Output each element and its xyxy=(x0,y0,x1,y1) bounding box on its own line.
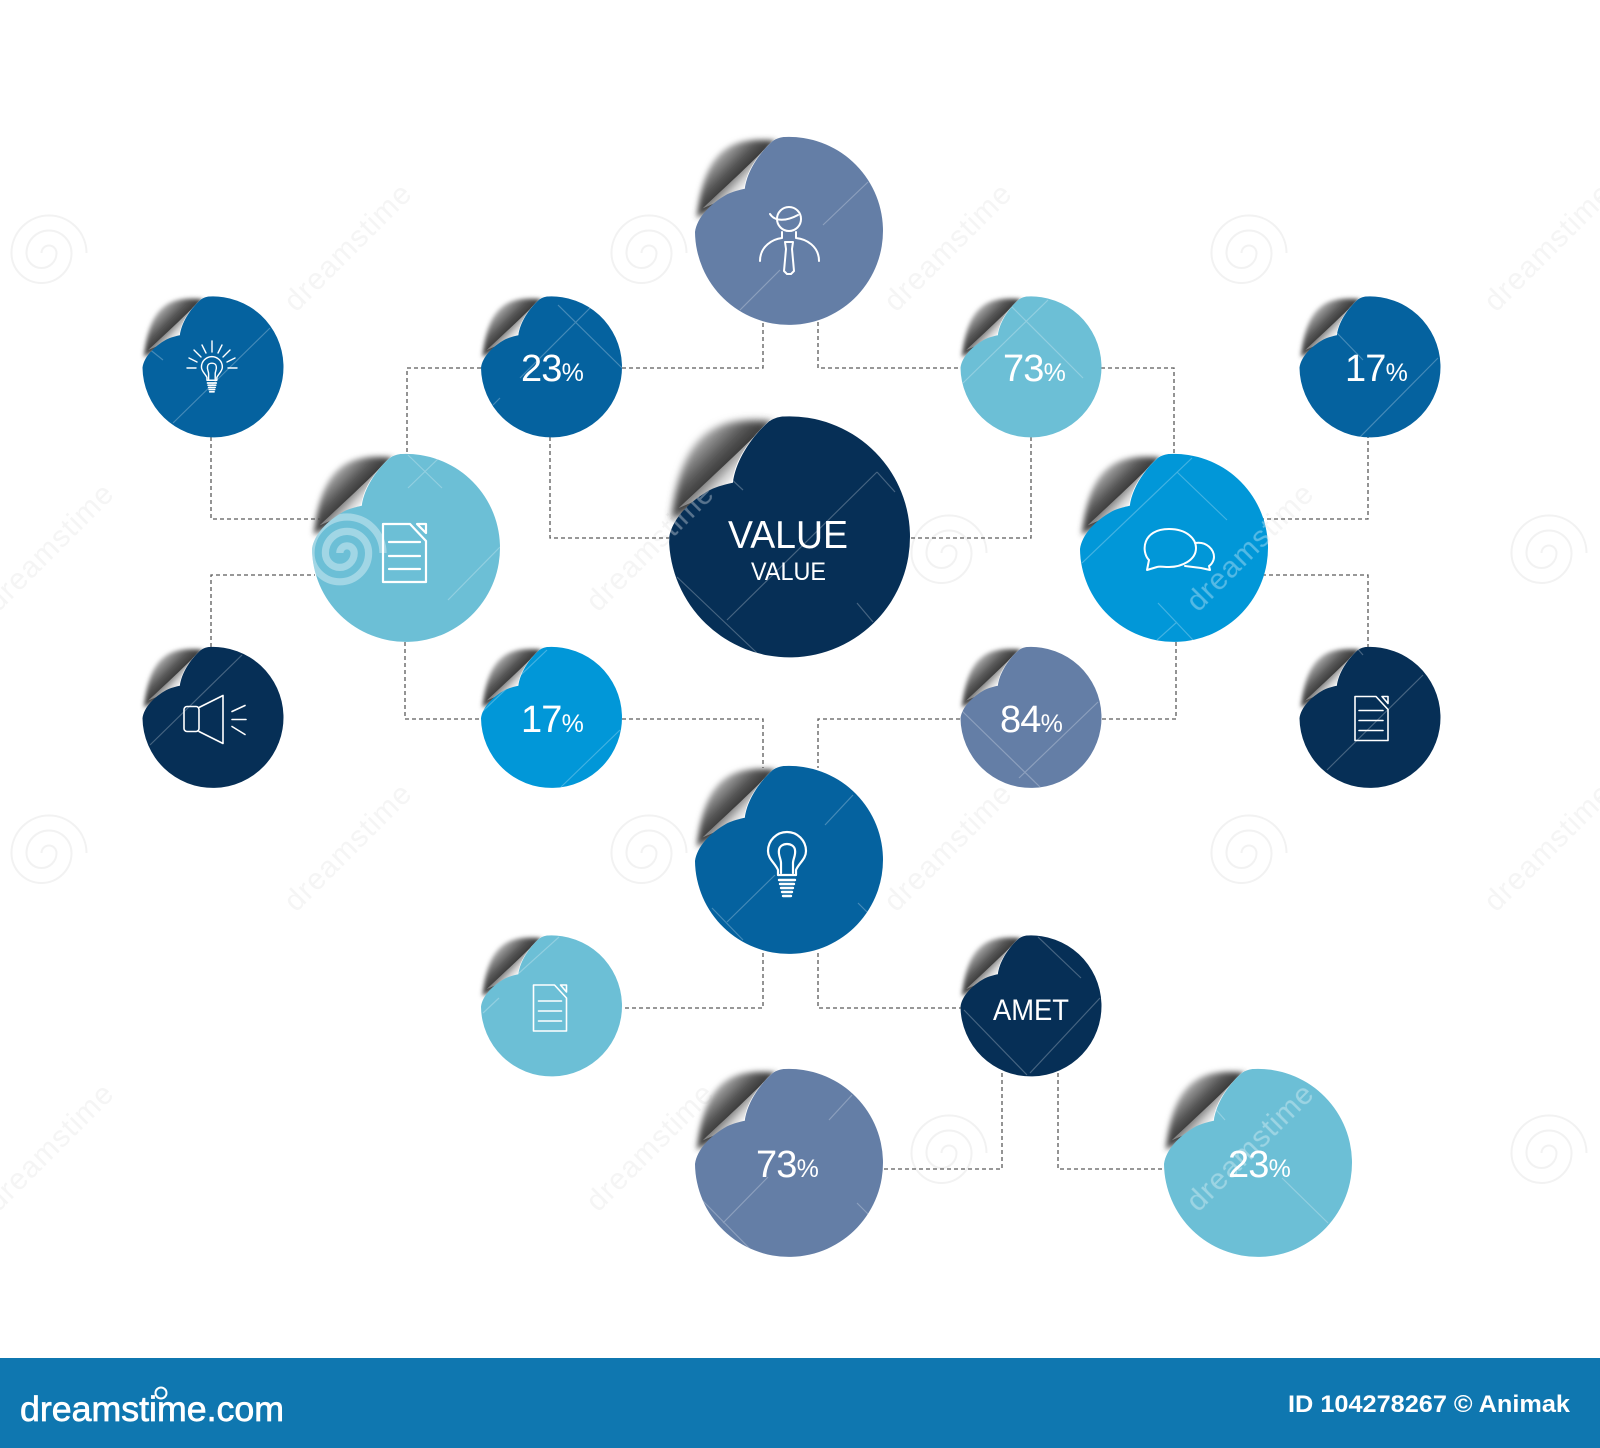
footer credit: ID 104278267 © Animak xyxy=(1288,1391,1571,1418)
value: 17%: 17% xyxy=(521,699,584,741)
watermark overlay on stickers xyxy=(148,182,1438,1250)
sticker: 73 percent (bottom) xyxy=(695,1069,883,1257)
watermark background: dreamstime xyxy=(878,777,1019,918)
watermark background: dreamstime xyxy=(278,777,419,918)
icon: document xyxy=(1355,696,1388,740)
sticker: person (top) xyxy=(695,137,883,325)
subheading: VALUE: VALUE xyxy=(751,558,826,586)
icon: person with tie xyxy=(760,207,819,274)
watermark overlay on stickers: dreamstime xyxy=(580,477,721,618)
footer logo: dreamstime.com: dreamstime.com xyxy=(20,1390,284,1429)
sticker: 23 percent xyxy=(481,296,622,437)
icon: light bulb xyxy=(768,832,806,896)
value: 84%: 84% xyxy=(1000,699,1063,741)
sticker: AMET xyxy=(960,935,1101,1076)
sticker: light bulb (lower centre) xyxy=(695,766,883,954)
watermark overlay on stickers: dreamstime xyxy=(1180,477,1321,618)
watermark background xyxy=(0,177,1600,1218)
sticker: small light bulb with rays xyxy=(142,296,283,437)
label: AMET: AMET xyxy=(993,994,1069,1027)
value: 73%: 73% xyxy=(1003,348,1066,390)
sticker: central value xyxy=(669,416,910,657)
watermark background: dreamstime xyxy=(580,477,721,618)
value: 17%: 17% xyxy=(1345,348,1408,390)
watermark background: dreamstime xyxy=(278,177,419,318)
watermark background: dreamstime xyxy=(878,177,1019,318)
value: 23%: 23% xyxy=(521,348,584,390)
sticker: 17 percent (right) xyxy=(1300,296,1440,437)
watermark background: dreamstime xyxy=(580,1077,721,1218)
value: 73%: 73% xyxy=(756,1144,819,1186)
sticker: 73 percent xyxy=(960,296,1101,437)
sticker: chat (right) xyxy=(1080,454,1268,642)
sticker: speaker xyxy=(142,647,283,788)
watermark background: dreamstime xyxy=(1180,477,1321,618)
dashed connector lines xyxy=(211,322,1368,1169)
sticker: document (left) xyxy=(312,454,500,642)
icon: document xyxy=(383,524,426,582)
sticker: small document xyxy=(481,935,622,1076)
icon: document xyxy=(534,985,566,1031)
sticker: 84 percent xyxy=(960,647,1101,788)
watermark background: dreamstime xyxy=(1180,1077,1321,1218)
value: 23%: 23% xyxy=(1228,1144,1291,1186)
sticker: dark document xyxy=(1300,647,1440,788)
icon: speech bubbles xyxy=(1145,529,1214,570)
footer bar xyxy=(0,1358,1600,1448)
icon: shining bulb xyxy=(187,341,237,392)
sticker: 23 percent (bottom right) xyxy=(1164,1069,1352,1257)
heading: VALUE: VALUE xyxy=(728,514,848,557)
icon: speaker xyxy=(184,696,246,744)
watermark overlay on stickers: dreamstime xyxy=(1180,1077,1321,1218)
sticker: 17 percent (left) xyxy=(481,647,622,788)
